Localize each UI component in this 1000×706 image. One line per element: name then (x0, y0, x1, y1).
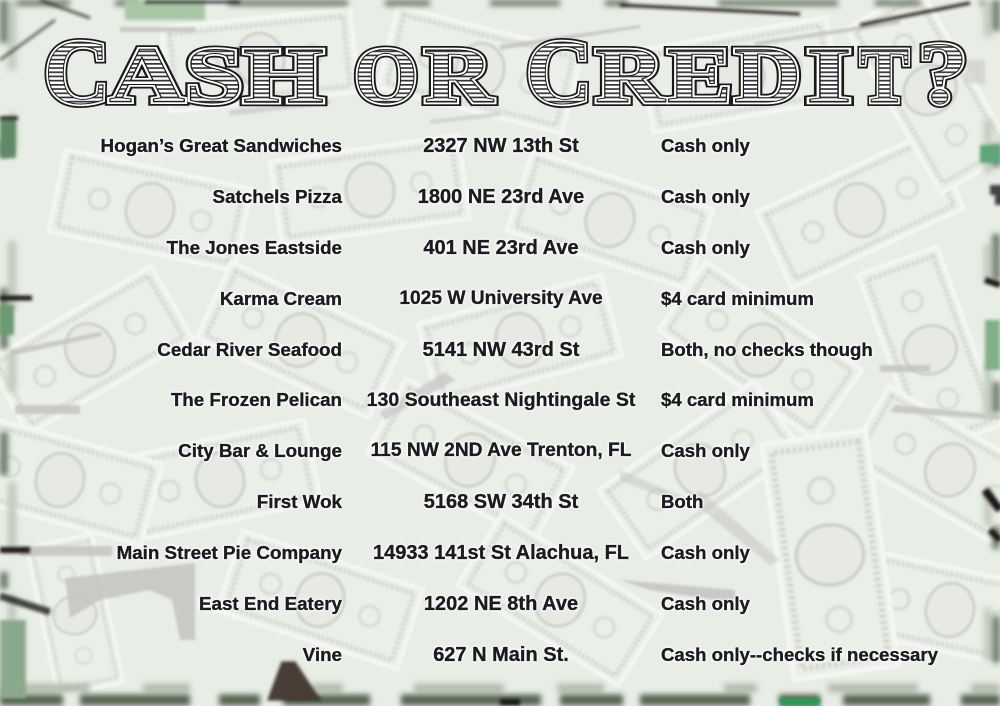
row: Hogan's Great Sandwiches: Hogan’s Great Sandwiches (101, 135, 342, 156)
row: East End Eatery: Cash only (661, 593, 750, 614)
row: The Jones Eastside (166, 237, 750, 260)
title outer outline: H (243, 33, 324, 120)
title white band: D (734, 33, 801, 120)
row: Karma Cream: Karma Cream (220, 288, 342, 309)
title white band: R (595, 33, 666, 120)
title outer outline (44, 21, 968, 123)
row: City Bar & Lounge: City Bar & Lounge (178, 440, 342, 461)
row: East End Eatery: East End Eatery (199, 593, 342, 614)
row: The Frozen Pelican (170, 389, 814, 412)
title striped fill: A (109, 33, 185, 120)
row: Main Street Pie Company: Cash only (661, 542, 750, 563)
title outer outline: O (354, 33, 418, 120)
title striped fill: E (667, 33, 732, 120)
row: Vine: Cash only--checks if necessary (661, 644, 938, 665)
title white band: ? (918, 26, 968, 123)
title striped fill: C (44, 21, 110, 123)
row: The Frozen Pelican: $4 card minimum (661, 389, 814, 410)
row: Cedar River Seafood: Both, no checks though (661, 339, 873, 360)
title striped fill: R (595, 33, 666, 120)
row: First Wok: First Wok (257, 491, 342, 512)
title white band: E (667, 33, 732, 120)
row: The Frozen Pelican: The Frozen Pelican (171, 389, 342, 410)
row: First Wok: Both (661, 491, 703, 512)
title outer outline: T (860, 33, 909, 120)
title white band: C (44, 21, 110, 123)
title striped fill: R (424, 33, 494, 120)
row: Hogan's Great Sandwiches (100, 135, 750, 158)
row: Vine: Vine (303, 644, 342, 665)
title striped fill: C (526, 21, 592, 123)
row: City Bar & Lounge: Cash only (661, 440, 750, 461)
row: City Bar & Lounge: 115 NW 2ND Ave Trenton, FL (371, 440, 631, 461)
title white band: H (243, 33, 324, 120)
row: Satchels Pizza: 1800 NE 23rd Ave (418, 186, 584, 208)
row: Vine (302, 644, 938, 666)
row: Cedar River Seafood: Cedar River Seafood (157, 339, 342, 360)
title white band (44, 21, 968, 123)
title white band: R (424, 33, 494, 120)
title striped fill: H (243, 33, 324, 120)
row: Satchels Pizza: Satchels Pizza (213, 186, 342, 207)
row: Vine: 627 N Main St. (433, 644, 569, 666)
row: Cedar River Seafood (156, 339, 874, 362)
title striped fill: S (185, 33, 243, 120)
title striped fill: D (734, 33, 801, 120)
title outer outline: R (424, 33, 494, 120)
row: Satchels Pizza: Cash only (661, 186, 750, 207)
row: Main Street Pie Company (116, 542, 751, 564)
title outer outline: A (109, 33, 185, 120)
row: First Wok: 5168 SW 34th St (424, 491, 578, 513)
row: The Jones Eastside: The Jones Eastside (167, 237, 342, 258)
title outer outline: C (44, 21, 110, 123)
title outer outline: R (595, 33, 666, 120)
row: East End Eatery (198, 593, 750, 616)
row: Satchels Pizza (212, 186, 750, 208)
title outer outline: ? (918, 26, 968, 123)
title white band: A (109, 33, 185, 120)
title white band: C (526, 21, 592, 123)
title outer outline: E (667, 33, 732, 120)
row: Hogan's Great Sandwiches: 2327 NW 13th St (423, 135, 579, 157)
row: Main Street Pie Company: Main Street Pie Company (117, 542, 342, 563)
title striped fill: O (354, 33, 418, 120)
title striped fill: I (806, 33, 852, 120)
title white band: I (806, 33, 852, 120)
title outer outline: C (526, 21, 592, 123)
title (44, 21, 968, 123)
row: City Bar & Lounge (177, 440, 751, 462)
row: First Wok (256, 491, 704, 513)
row: The Frozen Pelican: 130 Southeast Nightingale St (367, 389, 635, 411)
title white band: O (354, 33, 418, 120)
row: Karma Cream: $4 card minimum (661, 288, 814, 309)
title striped fill: ? (918, 26, 968, 123)
row: Cedar River Seafood: 5141 NW 43rd St (423, 339, 579, 361)
title white band: S (185, 33, 243, 120)
row: Karma Cream: 1025 W University Ave (399, 288, 603, 309)
row: Karma Cream (219, 288, 814, 310)
title striped fill: T (860, 33, 909, 120)
title outer outline: D (734, 33, 801, 120)
row: Hogan's Great Sandwiches: Cash only (661, 135, 750, 156)
title white band: T (860, 33, 909, 120)
title striped fill (44, 21, 968, 123)
row: The Jones Eastside: 401 NE 23rd Ave (423, 237, 579, 259)
row: The Jones Eastside: Cash only (661, 237, 750, 258)
title outer outline: S (185, 33, 243, 120)
row: East End Eatery: 1202 NE 8th Ave (424, 593, 578, 615)
title outer outline: I (806, 33, 852, 120)
row: Main Street Pie Company: 14933 141st St Alachua, FL (373, 542, 629, 564)
